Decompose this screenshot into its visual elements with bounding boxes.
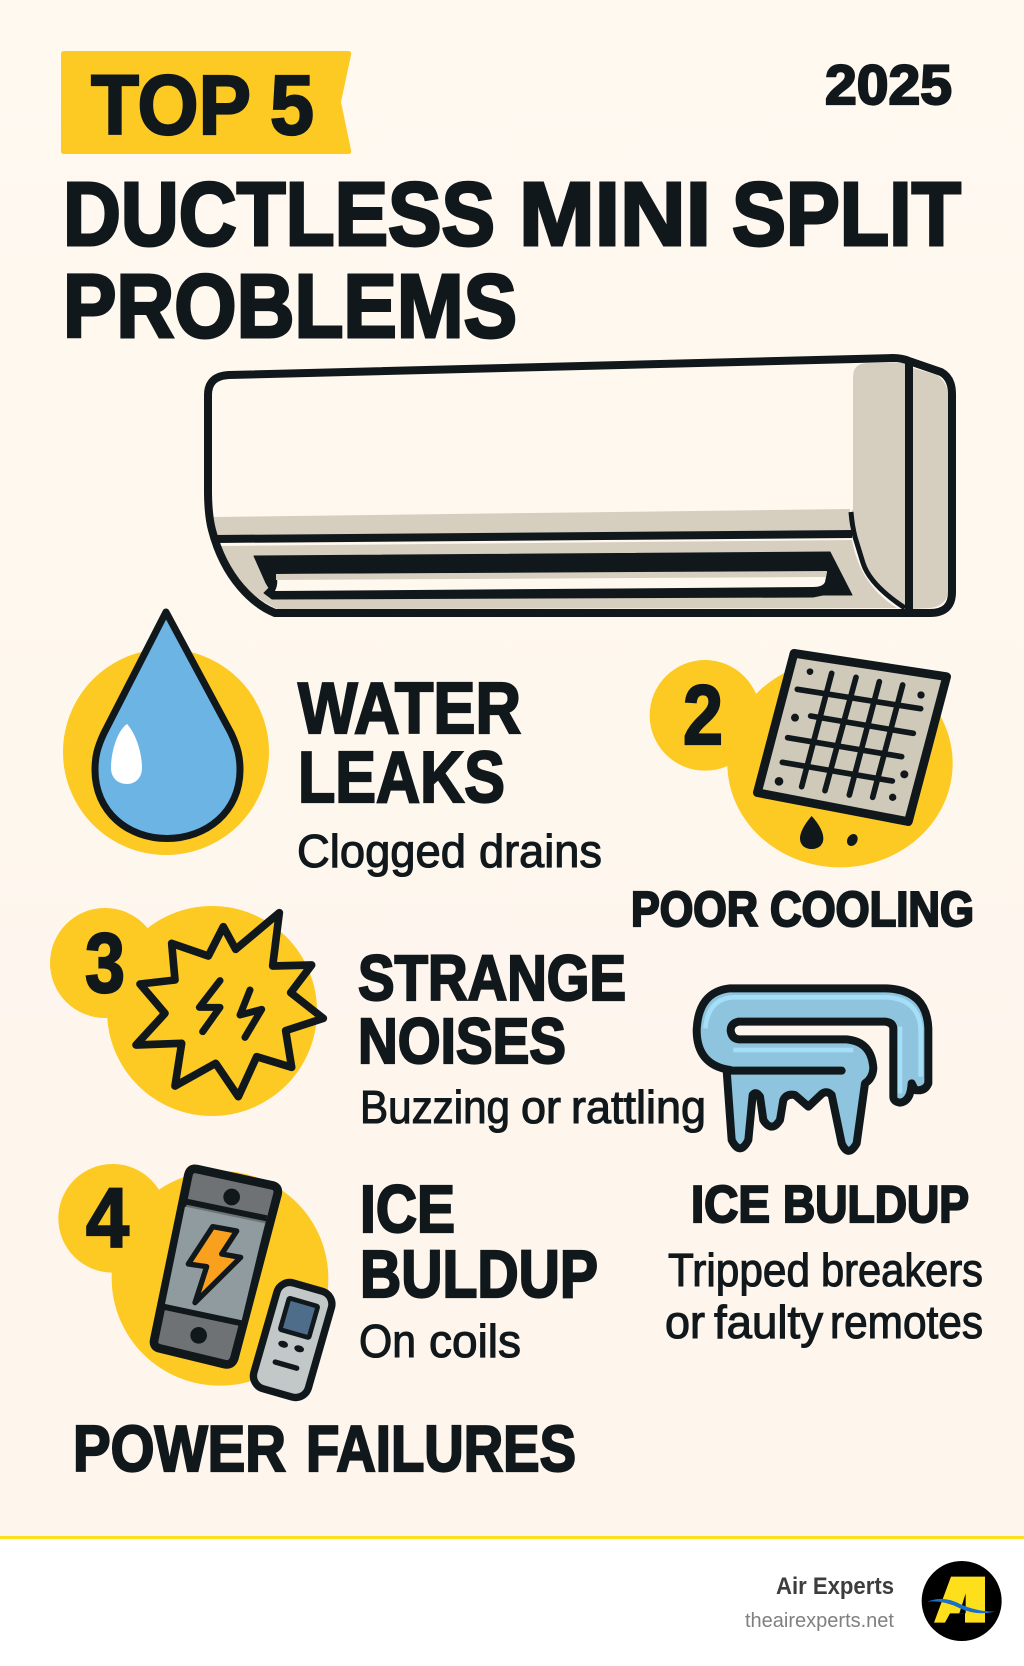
item 4: power failures icon [58,1164,335,1401]
item 3: strange noises text [358,942,706,1133]
power failures label: POWER [73,1412,286,1485]
item 1: water leaks text: LEAKS [298,738,505,818]
item 4: number badge: 4 [86,1171,129,1265]
item 4: ice buildup text [359,1172,598,1367]
footer brand text: Air Experts [776,1573,894,1600]
item 4: ice buildup text: ICE [360,1172,455,1247]
icon: remote control [250,1279,335,1401]
icon: frozen pipe with icicles [697,988,928,1151]
item 3: strange noises text: or [521,1081,561,1133]
illustration: mini split indoor unit [208,358,952,613]
item 4: ice buildup text: coils [429,1315,521,1367]
item 2: poor cooling icon [650,653,953,867]
banner: top 5 [61,51,351,154]
item 1: water leaks text: Clogged [297,825,466,877]
banner: top 5: 5 [270,58,314,152]
item 5: right column text: or [665,1296,705,1348]
item 2: number badge: 2 [683,668,723,762]
item 3: strange noises text: rattling [571,1081,706,1133]
item 4: ice buildup text: On [359,1315,416,1367]
power failures label: FAILURES [306,1412,576,1485]
item 5: right column text: breakers [821,1244,983,1296]
item 3: strange noises icon [50,906,323,1116]
title: DUCTLESS [63,165,495,265]
item 3: number badge: 3 [85,916,125,1010]
year: 2025 [825,53,952,116]
item 3: strange noises text: Buzzing [360,1081,510,1133]
item 3: strange noises text: STRANGE [358,942,626,1014]
title: MINI [519,165,711,265]
icon: air experts logo [922,1561,1002,1641]
title: PROBLEMS [63,257,517,357]
item 5: right column text: faulty [714,1296,823,1348]
item 2: poor cooling label [631,883,974,937]
item 1: water leaks text: drains [479,825,602,877]
banner: top 5: TOP [91,58,251,152]
title [63,165,961,357]
item 2: poor cooling label: COOLING [770,883,974,937]
item 1: water leaks icon [63,612,269,855]
footer [0,1536,1024,1666]
item 5: right column text [665,1176,983,1348]
title: SPLIT [732,165,961,265]
footer brand text [745,1573,894,1632]
item 5: right column text: remotes [830,1296,983,1348]
item 2: poor cooling label: POOR [631,883,758,937]
item 1: water leaks text: WATER [298,669,521,749]
power failures label [73,1412,576,1485]
item 1: water leaks text [297,669,602,877]
item 4: ice buildup text: BULDUP [360,1237,598,1312]
item 3: strange noises text: NOISES [358,1005,566,1077]
footer brand text: theairexperts.net [745,1610,894,1632]
item 5: right column text: ICE [691,1176,770,1234]
item 5: right column text: Tripped [668,1244,810,1296]
item 5: right column text: BULDUP [783,1176,969,1234]
